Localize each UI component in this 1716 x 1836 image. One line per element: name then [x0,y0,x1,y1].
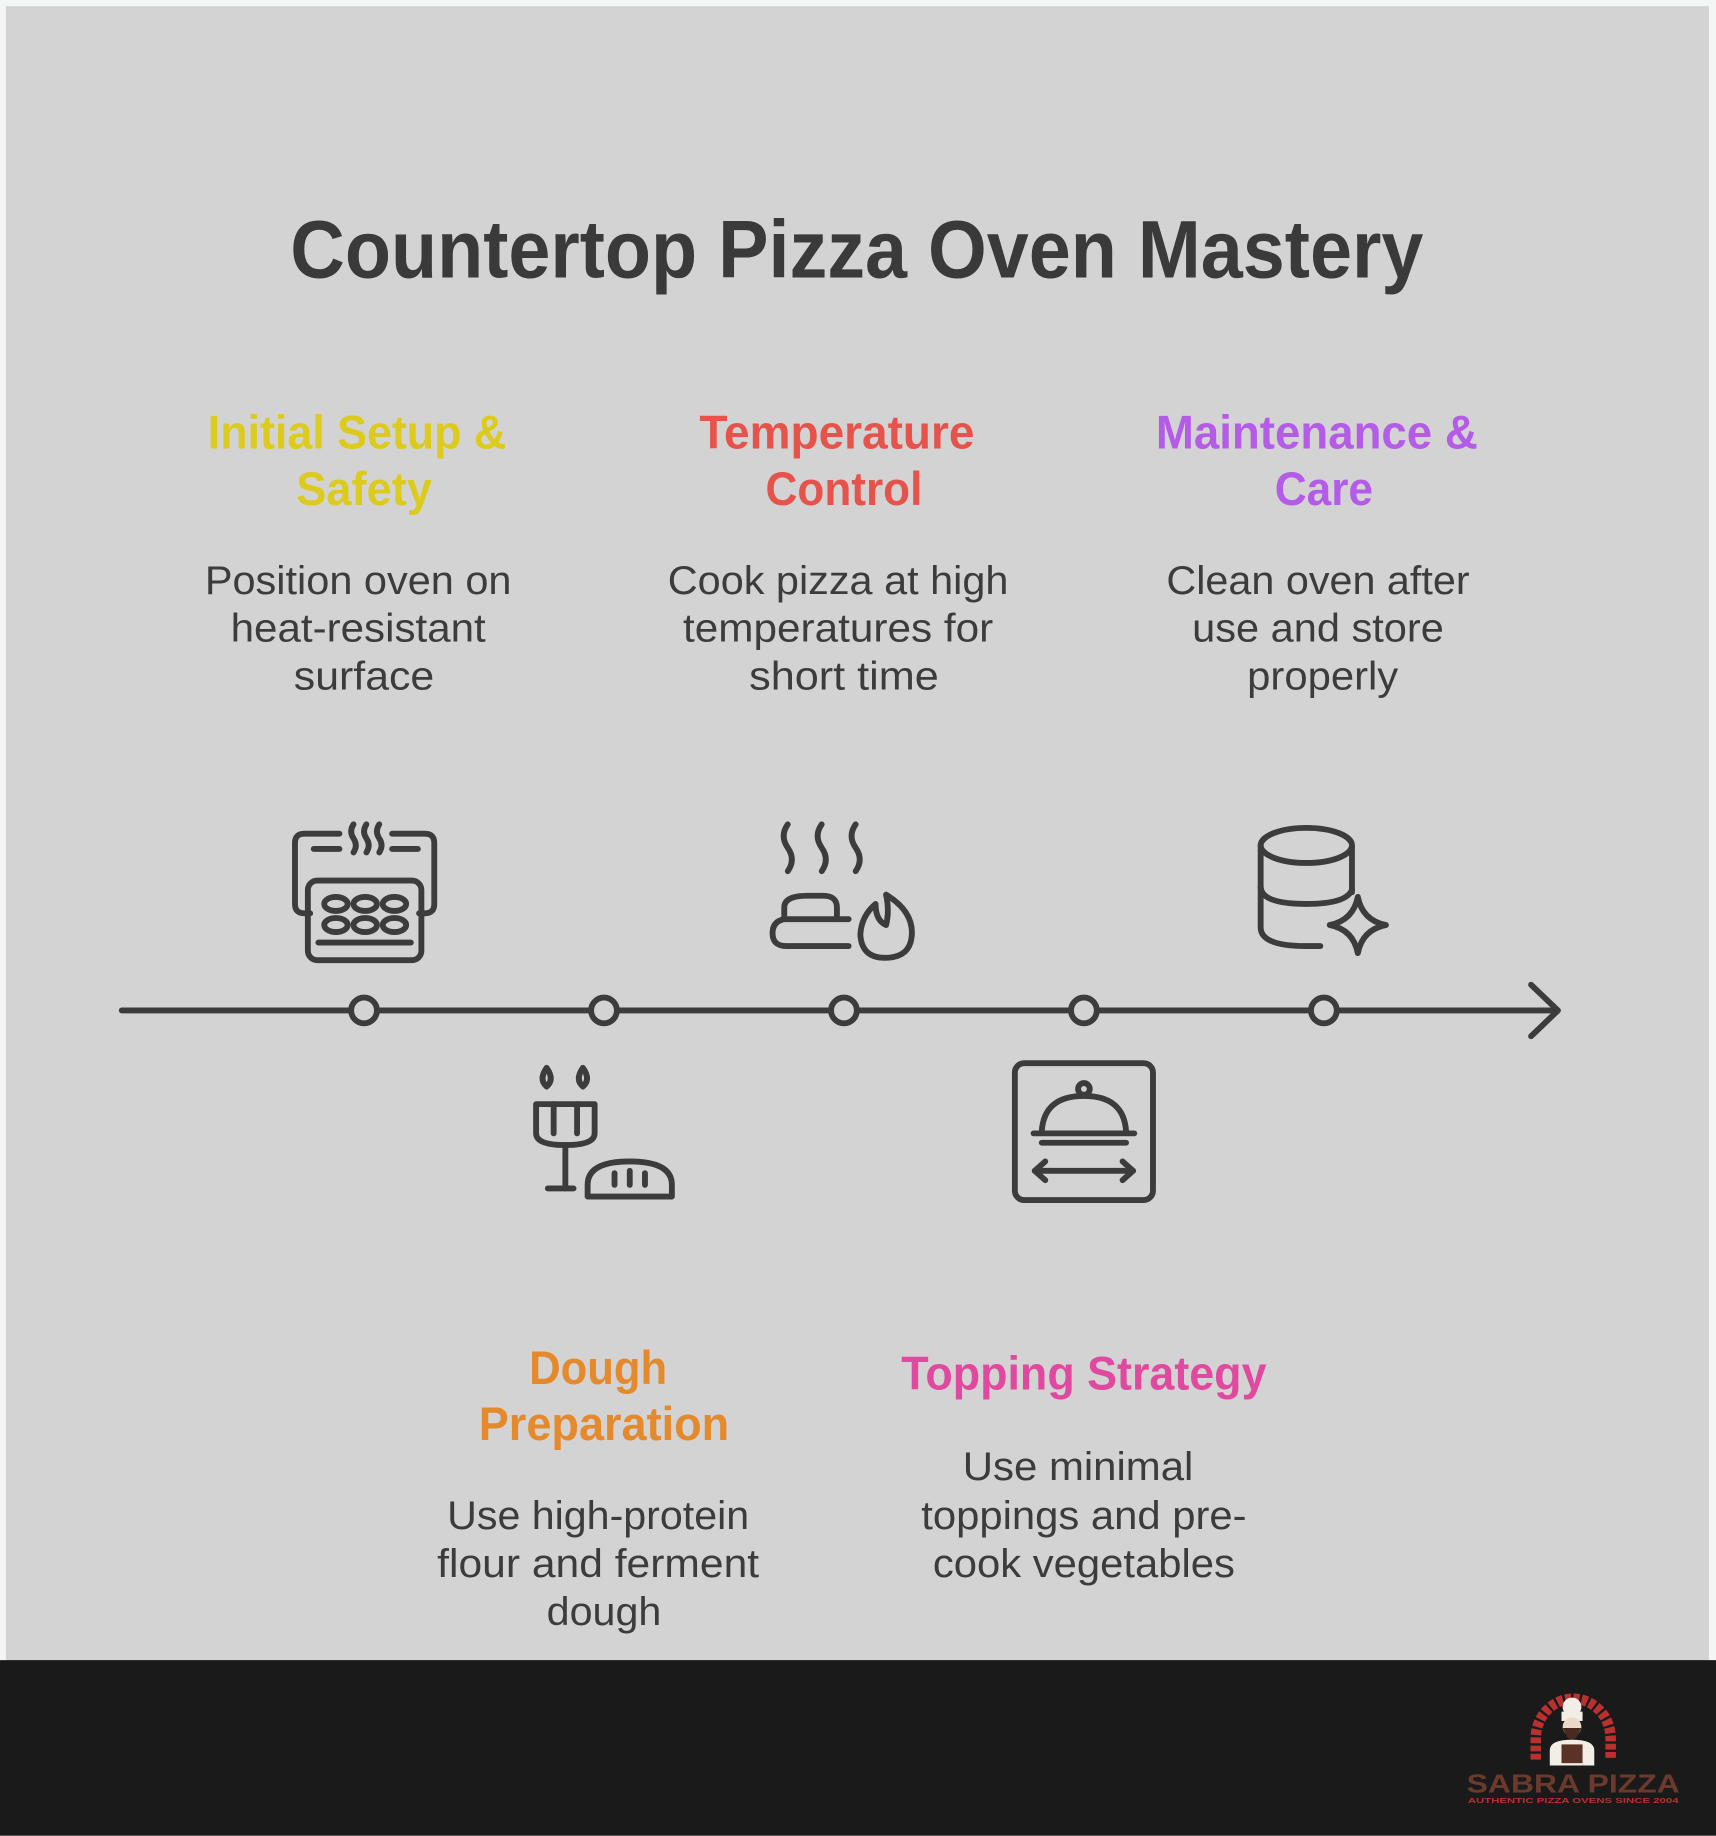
text: Maintenance: Clean oven after [1166,559,1470,603]
text: Topping [921,1445,1247,1586]
text: Initial Setup [205,559,512,699]
text: Maintenance [1166,559,1470,699]
text: Initial Setup: heat-resistant [231,607,486,651]
text: Maintenance: properly [1247,655,1398,699]
text: Temperature Control: temperatures for [683,607,993,651]
text: Topping: toppings and pre- [921,1494,1247,1538]
icon: steam pot flame [773,824,912,958]
heading: Dough Preparation: Preparation [479,1398,729,1450]
logo: Sabra Pizza: SABRA PIZZA [1467,1770,1680,1798]
text: Temperature Control: short time [749,655,939,699]
heading: Dough Preparation: Dough [529,1342,667,1394]
heading: Initial Setup & Safety [208,407,506,515]
text: Dough: flour and ferment [437,1542,759,1586]
icon: oven tray [295,824,434,960]
timeline arrow [122,985,1558,1036]
heading: Maintenance & Care: Care [1275,463,1373,515]
text: Dough [437,1494,759,1634]
text: Maintenance: use and store [1192,607,1444,651]
icon: cloche in square [1015,1063,1153,1200]
text: Dough: Use high-protein [447,1494,749,1538]
heading: Maintenance & Care: Maintenance & [1156,407,1478,459]
text: Topping: cook vegetables [933,1542,1235,1586]
heading: Dough Preparation [479,1342,729,1450]
logo: Sabra Pizza: AUTHENTIC PIZZA OVENS SINCE 2004 [1468,1798,1679,1805]
text: Initial Setup: surface [294,655,434,699]
heading: Initial Setup & Safety: Safety [296,463,432,515]
heading: Maintenance & Care [1156,407,1478,515]
heading: Temperature Control: Temperature [699,407,974,459]
icon: dough glass bread [536,1068,672,1197]
text: Topping: Use minimal [963,1445,1193,1489]
icon: database sparkle [1261,828,1386,953]
text: Dough: dough [547,1590,661,1634]
heading: Topping Strategy: Topping Strategy [901,1348,1267,1400]
heading: Temperature Control: Control [766,463,922,515]
footer bar [0,1660,1716,1836]
logo: Sabra Pizza [1467,1698,1680,1805]
heading: Initial Setup & Safety: Initial Setup & [208,407,506,459]
heading: Temperature Control [699,407,974,515]
title: Countertop Pizza Oven Mastery [290,205,1424,296]
text: Temperature Control: Cook pizza at high [668,559,1008,603]
text: Initial Setup: Position oven on [205,559,512,603]
text: Temperature Control [668,559,1008,699]
